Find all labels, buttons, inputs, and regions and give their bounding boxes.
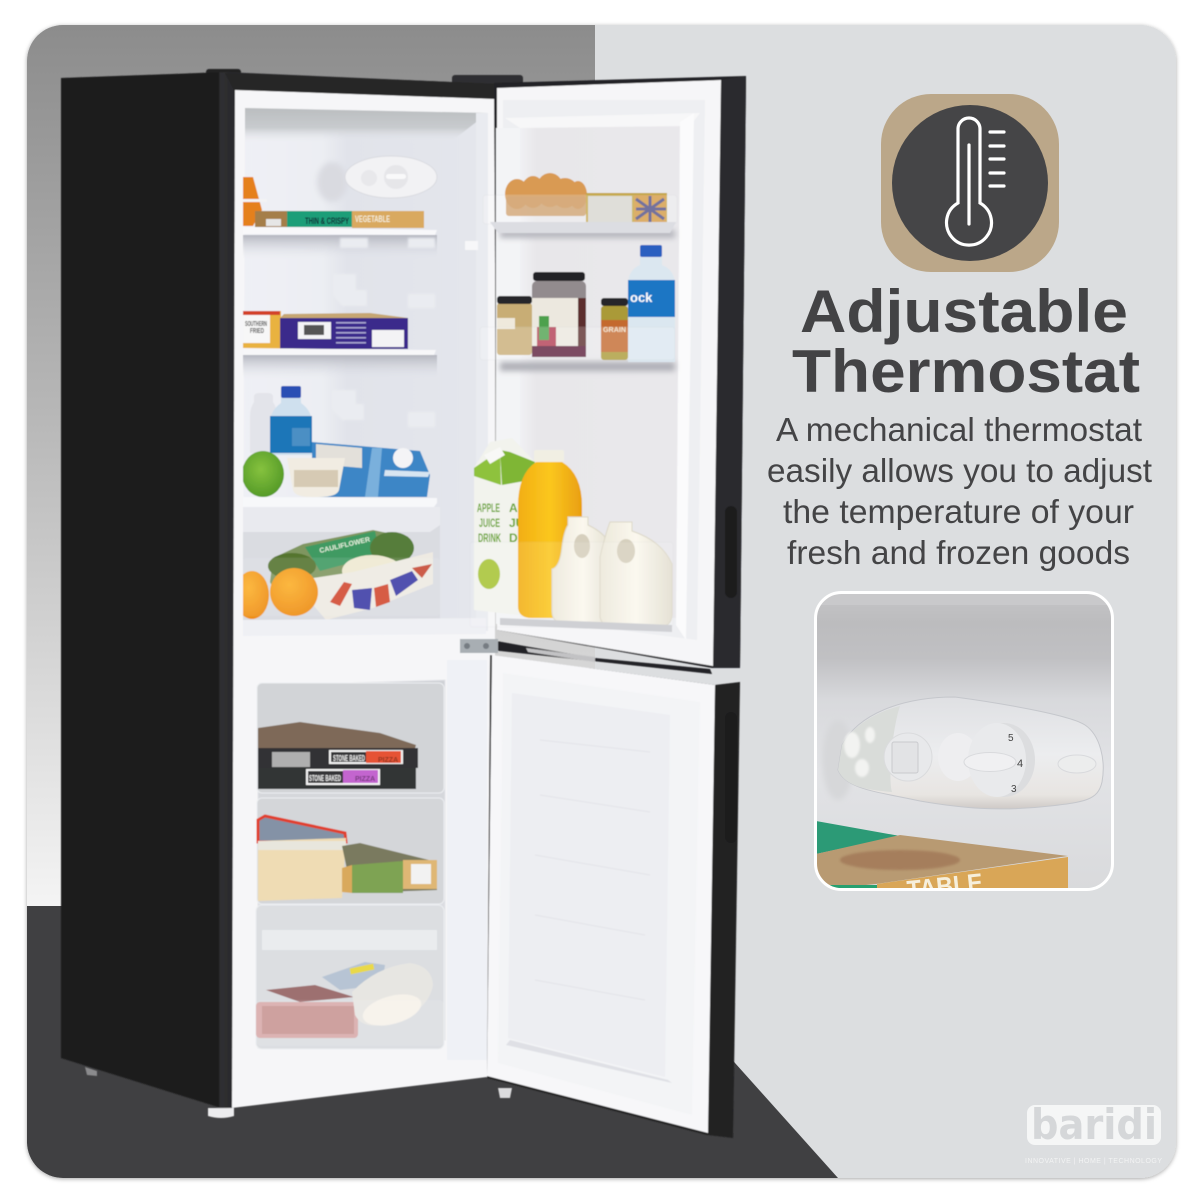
upper door xyxy=(494,76,746,668)
top freezer drawer with pizza boxes: STONE BAKED xyxy=(309,774,341,783)
door shelf with juice and milk: D xyxy=(509,531,518,545)
dial knob xyxy=(938,723,1035,797)
second shelf with food boxes xyxy=(243,311,436,355)
close-up photo: thermostat dial xyxy=(816,592,1112,905)
heading: Adjustable xyxy=(800,278,1128,345)
icon: thermometer badge xyxy=(881,94,1059,272)
door shelf with juice and milk xyxy=(470,438,673,632)
door shelf with jars and water bottle: GRAIN xyxy=(603,327,626,334)
middle freezer drawer with tub and box xyxy=(257,798,444,904)
food box: TABLE xyxy=(905,867,984,905)
door shelf with juice and milk: JU xyxy=(509,516,524,530)
crisper drawer with vegetables and oranges xyxy=(242,527,486,634)
thermostat unit in fridge xyxy=(317,156,437,202)
logo: baridi xyxy=(1031,1100,1157,1149)
door shelf with juice and milk: APPLE xyxy=(477,501,500,515)
door shelf with juice and milk: JUICE xyxy=(479,516,500,530)
top shelf with food boxes xyxy=(243,177,437,235)
description text: fresh and frozen goods xyxy=(787,534,1130,571)
description text: the temperature of your xyxy=(783,493,1134,530)
top freezer drawer with pizza boxes xyxy=(257,683,444,793)
fridge front frame xyxy=(232,90,495,1108)
refrigerator xyxy=(61,69,746,1138)
top shelf with food boxes: VEGETABLE xyxy=(355,214,390,224)
fridge compartment interior xyxy=(243,108,488,634)
fridge side and top xyxy=(61,69,523,1118)
crisper drawer with vegetables and oranges: CAULIFLOWER xyxy=(319,536,371,555)
logo: INNOVATIVE | HOME | TECHNOLOGY xyxy=(1025,1158,1162,1165)
door hinge xyxy=(460,639,712,674)
heading: Thermostat xyxy=(792,338,1140,405)
door shelf with eggs and butter xyxy=(483,173,677,238)
lower door xyxy=(487,655,740,1138)
top shelf with food boxes: THIN & CRISPY xyxy=(305,216,349,226)
thermometer xyxy=(946,118,1004,245)
door shelf with juice and milk: AP xyxy=(509,501,526,515)
description text: easily allows you to adjust xyxy=(767,452,1152,489)
dial housing xyxy=(838,697,1103,809)
logo xyxy=(1025,1100,1162,1165)
top freezer drawer with pizza boxes: STONE BAKED xyxy=(333,754,365,763)
dial knob: 4 xyxy=(1017,758,1023,770)
food box xyxy=(817,821,1068,888)
freezer compartment background xyxy=(258,660,487,1060)
door shelf with jars and water bottle: ock xyxy=(630,290,653,305)
third shelf with bottle, apple, tub and carton xyxy=(242,386,437,507)
second shelf with food boxes: SOUTHERN xyxy=(245,321,267,328)
description text: A mechanical thermostat xyxy=(776,411,1142,448)
dial knob: 5 xyxy=(1008,733,1014,744)
top freezer drawer with pizza boxes: PIZZA xyxy=(355,776,375,783)
bottom freezer drawer with frozen food xyxy=(256,905,444,1049)
second shelf with food boxes: FRIED xyxy=(250,328,264,335)
dial knob: 3 xyxy=(1011,784,1017,795)
heading xyxy=(792,278,1140,405)
door shelf with jars and water bottle xyxy=(480,245,675,371)
door shelf with juice and milk: DRINK xyxy=(478,531,501,545)
top freezer drawer with pizza boxes: PIZZA xyxy=(378,757,398,764)
description text xyxy=(767,411,1152,571)
